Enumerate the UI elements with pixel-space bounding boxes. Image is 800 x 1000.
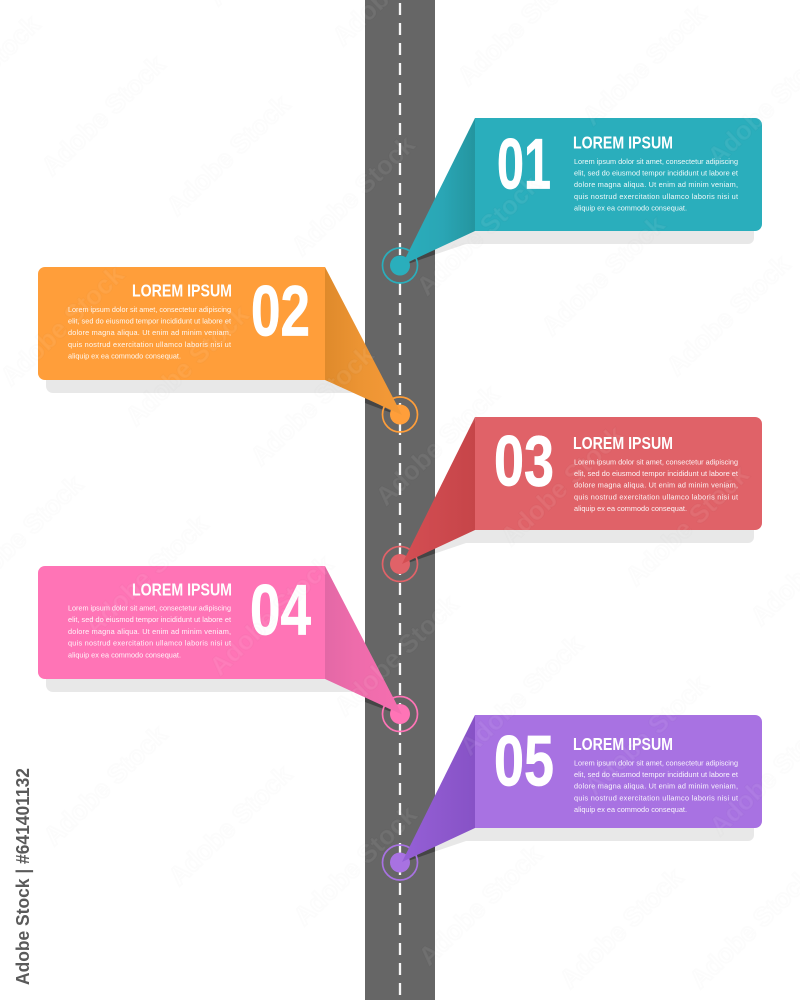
card 5 body — [574, 758, 738, 814]
card 2 title: LOREM IPSUM — [132, 280, 232, 300]
card 3 body: dolore magna aliqua. Ut enim ad minim veniam, — [574, 481, 738, 490]
card 1 body: dolore magna aliqua. Ut enim ad minim veniam, — [574, 180, 738, 189]
card 3 road shadow — [402, 547, 435, 565]
card 5 body: dolore magna aliqua. Ut enim ad minim veniam, — [574, 782, 738, 791]
card 1 marker — [382, 248, 418, 283]
card 4 road shadow — [365, 696, 400, 715]
card 1 pointer — [402, 118, 475, 265]
card 5 body: elit, sed do eiusmod tempor incididunt ut labore et — [574, 770, 738, 779]
watermark pattern: Adobe Stock — [578, 669, 714, 801]
card 3 pointer — [402, 417, 475, 564]
watermark pattern: Adobe Stock — [553, 862, 689, 994]
card 3 body: aliquip ex ea commodo consequat. — [574, 504, 687, 513]
watermark pattern: Adobe Stock — [244, 339, 380, 471]
card 3: red — [382, 417, 762, 582]
card 2 body: aliquip ex ea commodo consequat. — [68, 352, 181, 361]
card 2 body — [68, 305, 231, 361]
watermark pattern: Adobe Stock — [412, 839, 548, 971]
road — [365, 0, 435, 1000]
card 4 pointer — [325, 566, 402, 714]
card 3 body: Lorem ipsum dolor sit amet, consectetur adipiscing — [574, 457, 738, 466]
watermark pattern: Adobe Stock — [119, 299, 255, 431]
card 4 body: elit, sed do eiusmod tempor incididunt ut labore et — [68, 615, 231, 624]
card 2 body: quis nostrud exercitation ullamco laboris nisi ut — [68, 340, 231, 349]
card 4 title: LOREM IPSUM — [132, 580, 232, 600]
card 1 road shadow — [402, 248, 435, 266]
card 2: orange — [38, 267, 418, 432]
card 5 number: 05 — [494, 722, 554, 802]
watermark pattern: Adobe Stock — [535, 209, 671, 341]
card 4 number: 04 — [250, 572, 311, 650]
watermark pattern: Adobe Stock — [660, 249, 796, 381]
watermark pattern: Adobe Stock — [576, 0, 712, 131]
card 3 shadow — [435, 530, 754, 554]
card 1 body — [574, 157, 738, 213]
card 3 body: quis nostrud exercitation ullamco laboris nisi ut — [574, 492, 738, 501]
card 5 body: quis nostrud exercitation ullamco laboris nisi ut — [574, 793, 738, 802]
card 4 body — [68, 604, 231, 659]
watermark pattern: Adobe Stock — [35, 49, 171, 181]
watermark pattern: Adobe Stock — [369, 379, 505, 511]
card 4: pink — [38, 566, 418, 732]
card 4 shadow — [46, 679, 365, 697]
card 5: purple — [382, 715, 762, 880]
card 2 road shadow — [365, 397, 400, 416]
card 5 panel — [475, 715, 762, 828]
card 1 body: aliquip ex ea commodo consequat. — [574, 204, 687, 213]
watermark pattern: Adobe Stock — [37, 719, 173, 851]
card 1 body: Lorem ipsum dolor sit amet, consectetur adipiscing — [574, 157, 738, 166]
card 4 body: dolore magna aliqua. Ut enim ad minim veniam, — [68, 627, 231, 636]
card 2 body: dolore magna aliqua. Ut enim ad minim veniam, — [68, 328, 231, 337]
card 5 title: LOREM IPSUM — [573, 734, 673, 754]
card 4 body: aliquip ex ea commodo consequat. — [68, 650, 181, 659]
watermark pattern: Adobe Stock — [453, 629, 589, 761]
card 5 marker — [382, 845, 418, 880]
card 5 body: aliquip ex ea commodo consequat. — [574, 805, 687, 814]
card 2 body: Lorem ipsum dolor sit amet, consectetur adipiscing — [68, 305, 231, 314]
card 4 marker — [382, 696, 418, 732]
card 4 body: Lorem ipsum dolor sit amet, consectetur adipiscing — [68, 604, 231, 612]
watermark pattern: Adobe Stock — [410, 169, 546, 301]
card 1 panel — [475, 118, 762, 231]
card 2 pointer — [325, 267, 402, 415]
card 2 body: elit, sed do eiusmod tempor incididunt ut labore et — [68, 316, 231, 326]
watermark pattern: Adobe Stock — [160, 89, 296, 221]
watermark pattern: Adobe Stock — [78, 509, 214, 641]
card 1: teal — [382, 118, 762, 283]
card 3 body: elit, sed do eiusmod tempor incididunt ut labore et — [574, 469, 738, 478]
watermark pattern: Adobe Stock — [619, 459, 755, 591]
card 3 panel — [475, 417, 762, 530]
card 1 title: LOREM IPSUM — [573, 132, 673, 152]
card 1 shadow — [435, 231, 754, 254]
card 2 shadow — [46, 380, 365, 398]
card 1 number: 01 — [497, 126, 551, 204]
card 3 number: 03 — [494, 422, 554, 502]
card 2 marker — [382, 397, 418, 432]
card 5 road shadow — [402, 845, 435, 863]
stock id label: Adobe Stock | #641401132 — [12, 768, 33, 985]
card 4 body: quis nostrud exercitation ullamco laboris nisi ut — [68, 639, 231, 648]
watermark pattern: Adobe Stock — [328, 589, 464, 721]
card 1 body: quis nostrud exercitation ullamco laboris nisi ut — [574, 192, 738, 201]
watermark pattern: Adobe Stock — [203, 549, 339, 681]
card 3 marker — [382, 546, 418, 582]
card 5 pointer — [402, 715, 475, 862]
card 4 panel — [38, 566, 325, 679]
card 3 body — [574, 457, 738, 513]
card 5 body: Lorem ipsum dolor sit amet, consectetur adipiscing — [574, 758, 738, 767]
card 2 panel — [38, 267, 325, 380]
card 2 number: 02 — [251, 272, 310, 352]
card 5 shadow — [435, 828, 754, 852]
card 1 body: elit, sed do eiusmod tempor incididunt ut labore et — [574, 168, 738, 178]
watermark pattern: Adobe Stock — [287, 799, 423, 931]
watermark pattern: Adobe Stock — [285, 129, 421, 261]
watermark pattern: Adobe Stock — [494, 419, 630, 551]
card 3 title: LOREM IPSUM — [573, 433, 673, 453]
watermark pattern: Adobe Stock — [162, 759, 298, 891]
